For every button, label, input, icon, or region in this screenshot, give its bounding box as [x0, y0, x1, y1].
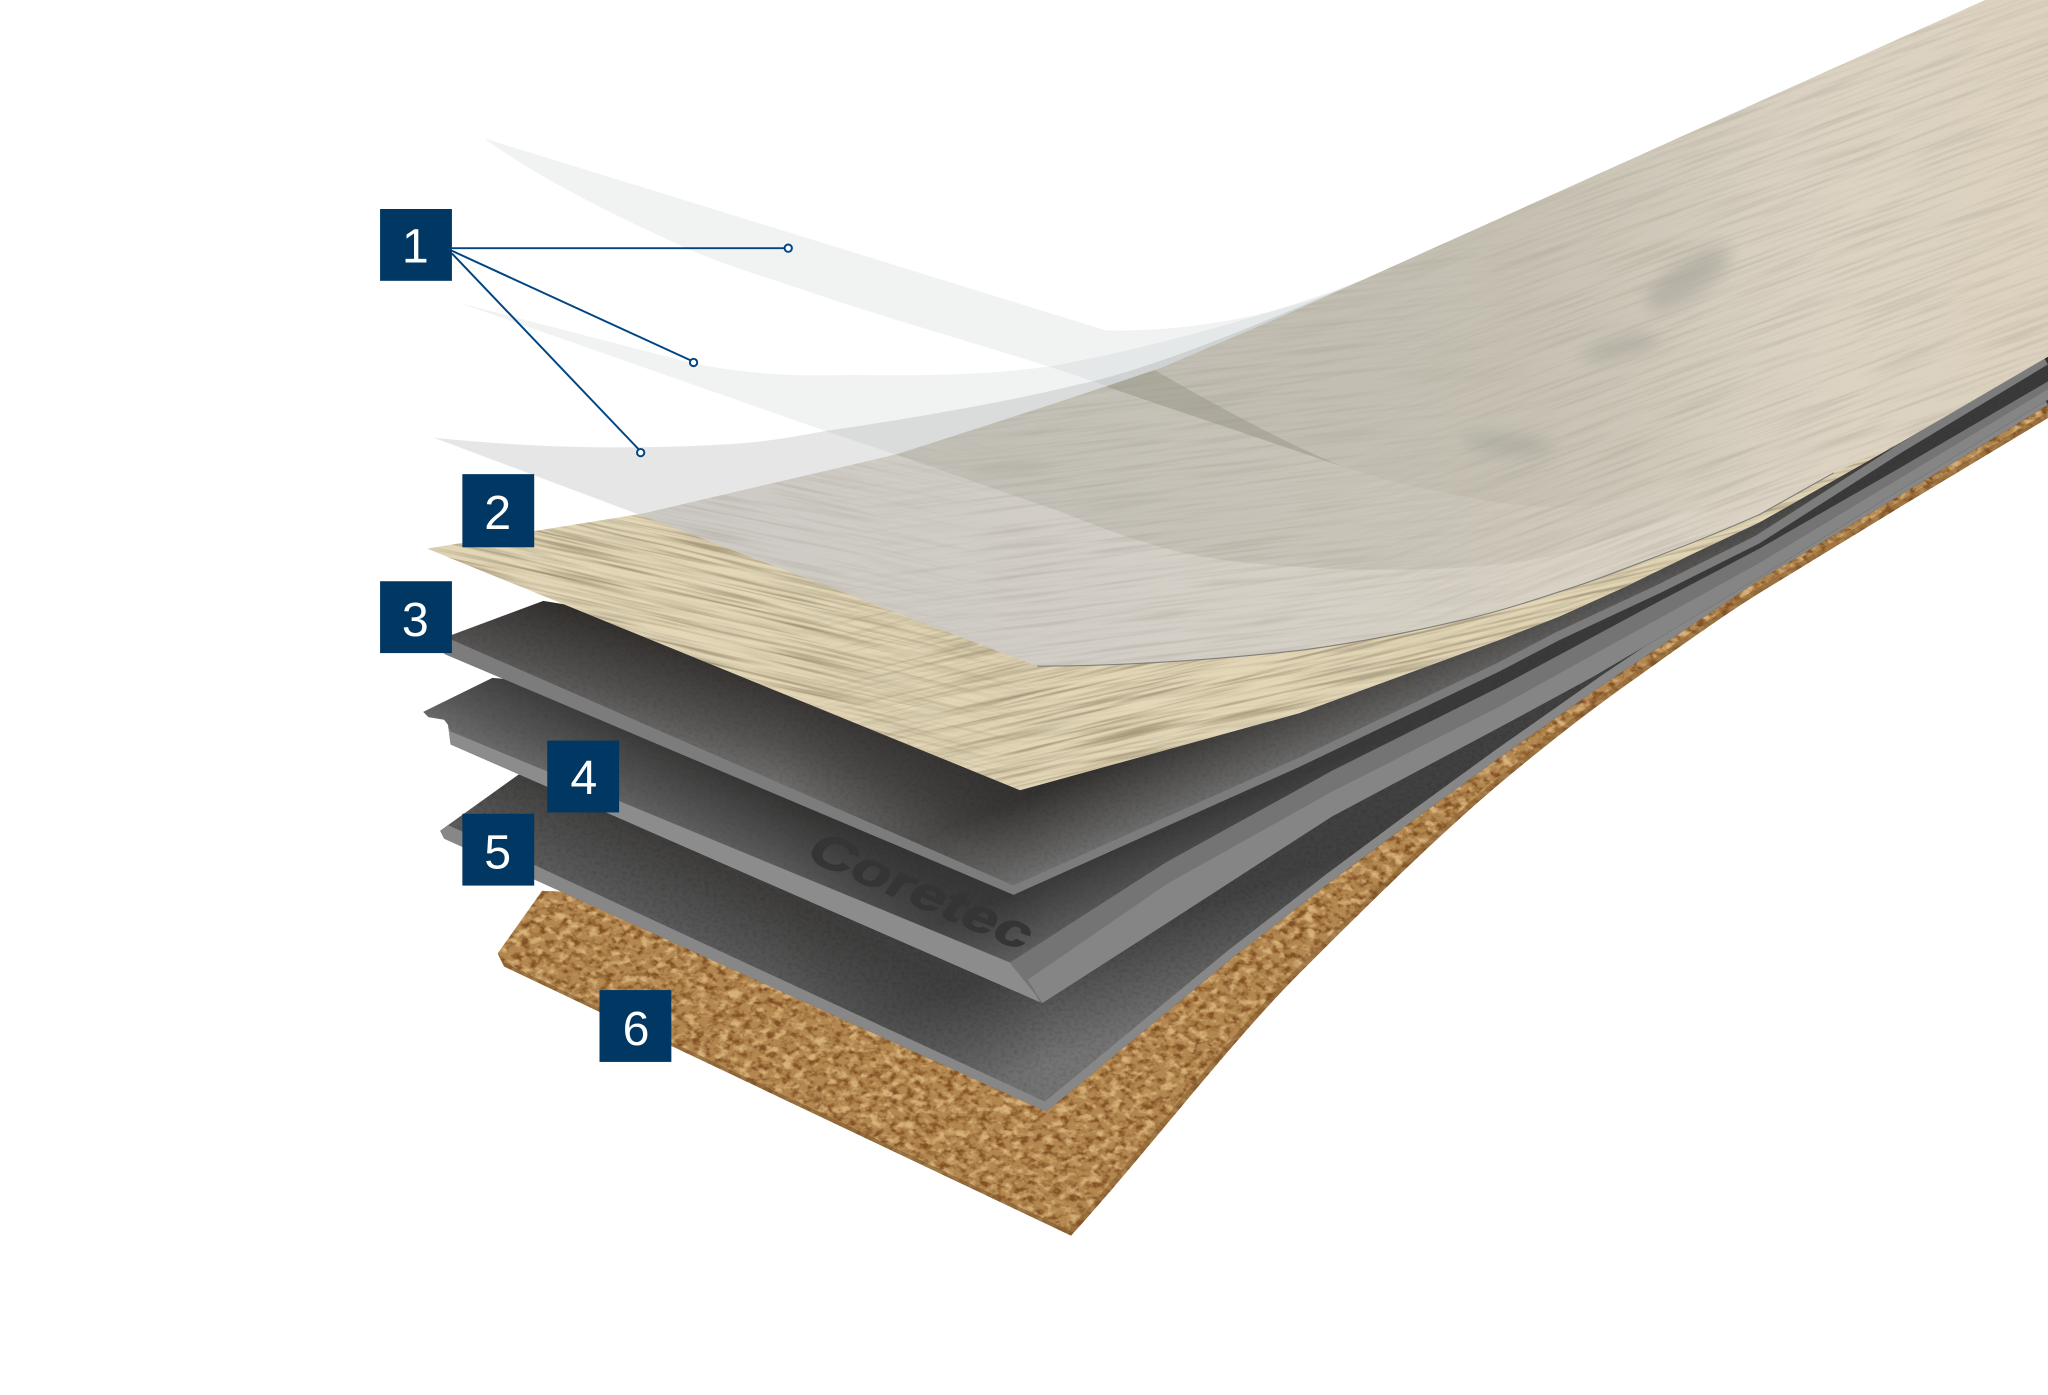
number label 5: 5 [484, 826, 511, 880]
number label 3 [380, 581, 452, 653]
number label 2: 2 [484, 486, 511, 540]
layer 1: transparent wear layer sheets over white [434, 138, 1364, 522]
layer 6: cork backing [483, 366, 2048, 1254]
overlap wedge [1106, 367, 1345, 468]
callout leader lines for label 1 [452, 245, 792, 456]
number label 2 [462, 474, 534, 547]
number label 1: 1 [402, 220, 429, 274]
exploded plank layer diagram [380, 0, 2048, 1236]
core side edge [423, 712, 1042, 1006]
number label 4 [547, 741, 619, 812]
layer 2: wood decor print [418, 0, 2048, 797]
layer 4: Coretec rigid core [423, 382, 2048, 1003]
wood knots [1461, 236, 1739, 459]
wood grain through wear layer [418, 0, 2048, 797]
number label 1 [380, 209, 452, 281]
number label 6: 6 [623, 1002, 650, 1056]
number label 3: 3 [402, 593, 429, 647]
layer 5: lower grey backing sheet [431, 340, 2048, 1123]
wear layer lower edge [1037, 473, 1834, 666]
layer 3: upper grey sheet [444, 357, 2048, 895]
number label 5 [462, 814, 534, 886]
tongue ridge [1010, 381, 2048, 1003]
number label 6 [600, 990, 671, 1062]
number label 4: 4 [570, 751, 597, 805]
layer 1: wear layer sheets on the plank [638, 0, 2048, 666]
brand mark: Coretec [797, 824, 1047, 959]
